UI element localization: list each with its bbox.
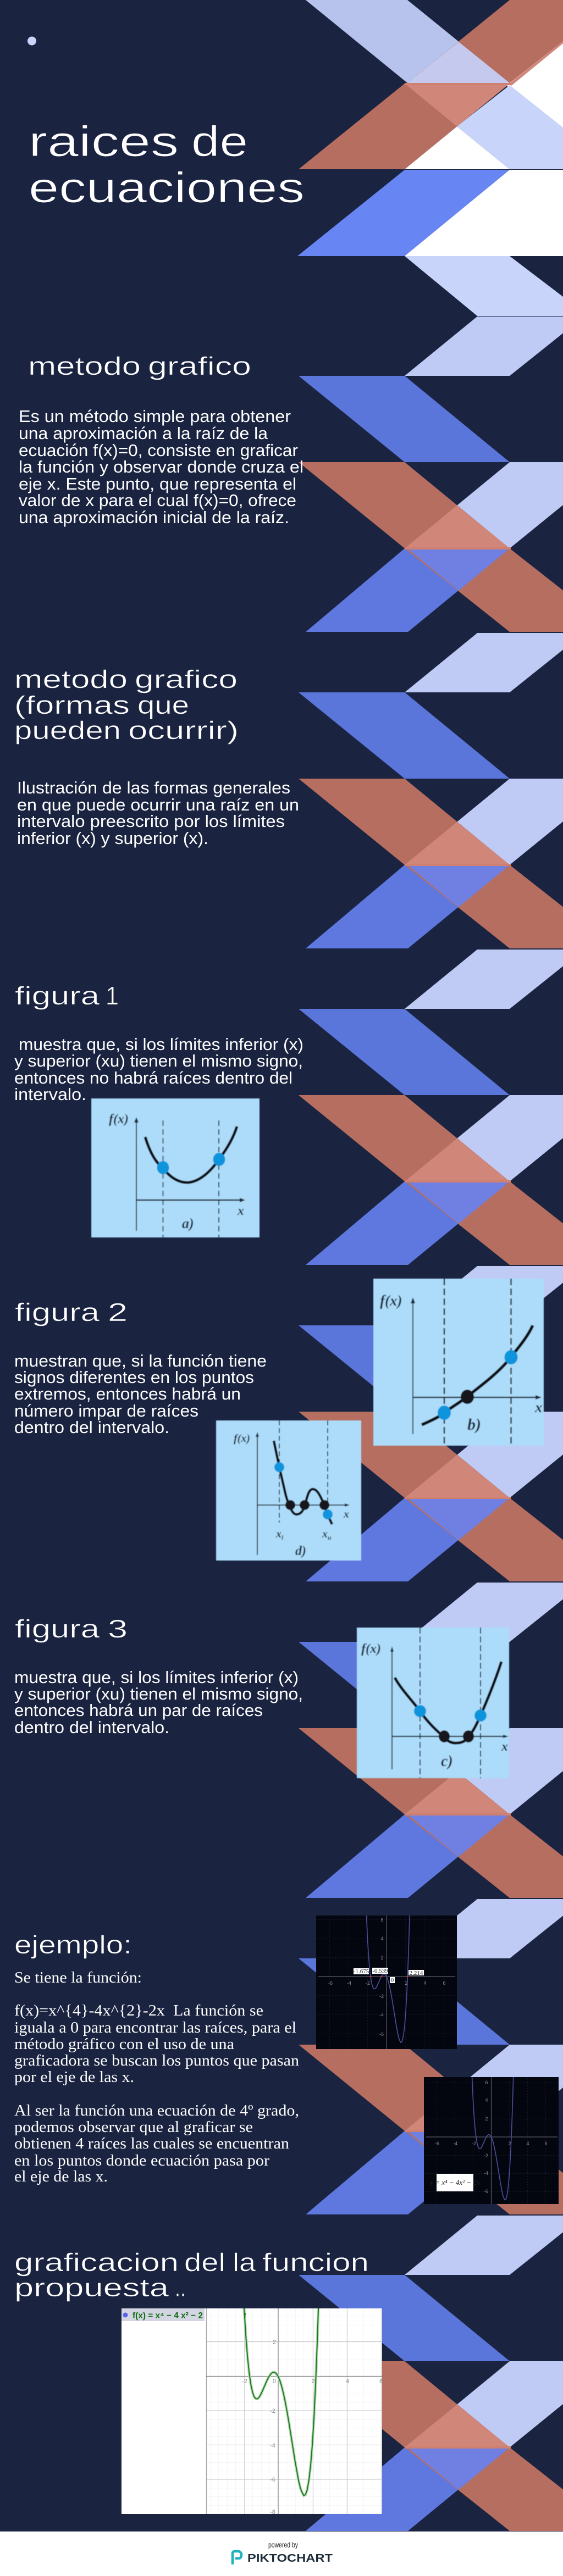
text block: metodo grafico description: ecuación f(x)=0, consiste en graficar xyxy=(19,441,298,460)
heading: graficacion de la funcion: propuesta xyxy=(14,2273,169,2302)
heading: graficacion de la funcion xyxy=(14,2248,369,2302)
text block: ejemplo xyxy=(14,1969,300,2185)
chart: figure b: f(x) xyxy=(380,1292,402,1309)
text block: ejemplo: Se tiene la función: xyxy=(14,1969,142,1986)
chart: dark graph with equation: 6 xyxy=(485,2080,488,2085)
chart: figure d: f(x) xyxy=(234,1433,250,1445)
chart: function graph white panel: -4 xyxy=(270,2442,275,2449)
text block: figura 2: dentro del intervalo. xyxy=(14,1418,169,1437)
chart: function graph white panel: 6 xyxy=(379,2378,383,2385)
heading: ejemplo: ejemplo: xyxy=(14,1930,132,1959)
text block: ejemplo: obtienen 4 raíces las cuales se encuentran xyxy=(14,2135,290,2152)
heading: metodo grafico: metodo xyxy=(28,352,141,380)
chart: dark graph with equation: y = x⁴ − 4x² − 2x xyxy=(429,2178,480,2186)
chart: figure c: c) xyxy=(441,1753,453,1770)
chart: figure b: b) xyxy=(467,1415,481,1434)
text block: metodo grafico description: valor de x para el cual f(x)=0, ofrece xyxy=(19,491,296,510)
text block: metodo grafico description: eje x. Este punto, que representa el xyxy=(19,474,296,493)
chart: dark graph with roots: 6 xyxy=(380,1917,384,1923)
chart: dark graph with equation: 2 xyxy=(485,2116,488,2122)
piktochart wordmark: PIKTOCHART xyxy=(247,2552,333,2564)
heading: metodo grafico formas: (formas xyxy=(14,691,130,719)
heading: figura 3: figura xyxy=(15,1614,100,1643)
chart: dark graph with equation: 4 xyxy=(526,2141,529,2146)
heading: metodo grafico formas: pueden xyxy=(14,716,121,745)
heading: metodo grafico xyxy=(28,352,251,380)
title: raices xyxy=(29,117,179,165)
chart: function graph white panel: 0 xyxy=(273,2378,276,2385)
text block: formas description: Ilustración de las formas generales xyxy=(17,778,290,797)
heading: figura 1 xyxy=(15,981,119,1010)
chart: dark graph with equation: -6 xyxy=(435,2141,439,2146)
chart: dark graph with roots: -2 xyxy=(366,1980,370,1986)
chart: function graph white panel: -6 xyxy=(270,2477,275,2483)
chart: dark graph with equation: -6 xyxy=(484,2189,488,2194)
text block: metodo grafico description: una aproximación inicial de la raíz. xyxy=(19,508,289,527)
text block: metodo grafico description: la función y observar donde cruza el xyxy=(19,457,303,476)
chart: dark graph with equation: 4 xyxy=(485,2097,488,2103)
heading: graficacion de la funcion: la xyxy=(233,2248,256,2277)
chart: dark graph with roots: -0.539 xyxy=(372,1968,388,1974)
chart: function graph white panel: f xyxy=(244,2312,246,2320)
chart: dark graph with roots: -2 xyxy=(379,1994,384,1999)
chart: figure d: u xyxy=(328,1534,332,1541)
text block: ejemplo: iguala a 0 para encontrar las raíces, para el xyxy=(14,2019,296,2036)
chart: function graph white panel: 2 xyxy=(273,2339,276,2346)
chart: function graph white panel: f(x) = x⁴ − 4 x² − 2 xyxy=(133,2311,203,2320)
chart: figure d: x xyxy=(343,1508,349,1520)
text block: figura 3 xyxy=(14,1668,303,1737)
text block: formas description: en que puede ocurrir una raíz en un xyxy=(17,795,299,814)
text block: ejemplo: en los puntos donde ecuación pasa por xyxy=(14,2152,269,2169)
heading: figura 2: figura xyxy=(15,1298,100,1326)
heading: graficacion de la funcion: funcion xyxy=(262,2248,369,2277)
chart: figure d: l xyxy=(282,1534,284,1541)
title: de xyxy=(191,117,248,165)
text block: figura 3: entonces habrá un par de raíces xyxy=(14,1701,263,1720)
heading: metodo grafico formas: que xyxy=(137,691,189,719)
heading: figura 3: 3 xyxy=(108,1614,128,1643)
chart: dark graph with roots: 0 xyxy=(391,1977,394,1984)
bullet dot xyxy=(27,36,36,45)
text block: formas description xyxy=(17,778,299,848)
text block: ejemplo: podemos observar que al graficar se xyxy=(14,2118,253,2136)
text block: figura 1: muestra que, si los límites inferior (x) xyxy=(19,1035,303,1054)
text block: figura 1: entonces no habrá raíces dentro del xyxy=(14,1068,292,1087)
text block: ejemplo: Al ser la función una ecuación de 4º grado, xyxy=(14,2102,299,2119)
title xyxy=(29,117,305,212)
chart: function graph white panel: -2 xyxy=(242,2378,247,2385)
text block: figura 1: y superior (xu) tienen el mismo signo, xyxy=(14,1051,303,1070)
heading: figura 2: 2 xyxy=(108,1298,128,1326)
text block: figura 3: muestra que, si los límites inferior (x) xyxy=(14,1668,299,1687)
heading: metodo grafico formas: grafico xyxy=(135,665,238,693)
chart: dark graph with roots: 6 xyxy=(443,1980,446,1986)
chart: figure c: x xyxy=(501,1740,508,1754)
text block: figura 3: y superior (xu) tienen el mismo signo, xyxy=(14,1684,303,1703)
footer xyxy=(0,2531,563,2576)
chart: dark graph with equation: -4 xyxy=(453,2141,457,2146)
chart: dark graph with roots: -4 xyxy=(379,2012,384,2018)
chart: dark graph with equation: -2 xyxy=(472,2141,476,2146)
icon: piktochart logo xyxy=(233,2551,241,2564)
chart: function graph white panel: -2 xyxy=(270,2408,275,2414)
heading: figura 1: 1 xyxy=(106,981,119,1010)
heading: metodo grafico formas xyxy=(14,665,239,745)
chart: figure d: d) xyxy=(295,1544,306,1558)
chart: dark graph with roots xyxy=(316,1916,457,2049)
heading: metodo grafico formas: metodo xyxy=(14,665,128,693)
text block: figura 2: número impar de raíces xyxy=(14,1401,198,1420)
chart: figure b: x xyxy=(534,1399,542,1415)
text block: figura 1: intervalo. xyxy=(14,1085,86,1104)
heading: graficacion de la funcion: del xyxy=(184,2248,225,2277)
chart: figure a: x xyxy=(237,1204,244,1218)
chart: function graph white panel: 4 xyxy=(346,2378,349,2385)
chart: dark graph with roots: 4 xyxy=(380,1936,384,1941)
chart: figure a xyxy=(91,1098,260,1237)
chart: figure d: x xyxy=(322,1528,328,1540)
chart: dark graph with equation: 2 xyxy=(508,2141,511,2146)
chart: function graph white panel: -8 xyxy=(270,2509,275,2516)
chart: figure d: x xyxy=(276,1528,282,1540)
heading: figura 2 xyxy=(15,1298,128,1326)
text block: formas description: intervalo preescrito por los límites xyxy=(17,812,285,831)
text block: ejemplo: por el eje de las x. xyxy=(14,2068,134,2086)
text block: formas description: inferior (x) y superior (x). xyxy=(17,829,208,848)
chart: dark graph with roots: -6 xyxy=(328,1980,333,1986)
chart: figure d xyxy=(216,1420,361,1561)
text block: metodo grafico description: una aproximación a la raíz de la xyxy=(19,424,268,443)
chart: dark graph with roots: 2 xyxy=(405,1980,408,1986)
chart: function graph white panel xyxy=(122,2308,383,2514)
chart: figure a: a) xyxy=(182,1215,194,1231)
text block: ejemplo: método gráfico con el uso de una xyxy=(14,2035,234,2053)
powered by label: powered by xyxy=(268,2540,298,2549)
chart: dark graph with roots: 2 xyxy=(380,1955,384,1961)
heading: graficacion de la funcion: graficacion xyxy=(14,2248,179,2277)
chart: function graph white panel: 2 xyxy=(311,2378,315,2385)
chart: dark graph with roots: -1.675 xyxy=(354,1968,369,1975)
chart: dark graph with roots: 4 xyxy=(423,1980,427,1986)
chart: dark graph with equation: -4 xyxy=(484,2170,488,2176)
text block: figura 2 xyxy=(14,1351,267,1437)
title: ecuaciones xyxy=(29,163,305,212)
chart: figure c xyxy=(357,1628,509,1778)
chart: dark graph with roots: -6 xyxy=(379,2031,384,2037)
decorative geometric shapes xyxy=(297,0,563,2531)
heading: metodo grafico: grafico xyxy=(148,352,251,380)
chart: dark graph with equation: 6 xyxy=(544,2141,548,2146)
heading: figura 1: figura xyxy=(15,981,100,1010)
text block: ejemplo: f(x)=x^{4}-4x^{2}-2x La función se xyxy=(14,2002,263,2019)
text block: figura 1 xyxy=(14,1035,303,1104)
chart: figure b xyxy=(373,1279,544,1446)
text block: ejemplo: graficadora se buscan los puntos que pasan xyxy=(14,2052,300,2069)
chart: figure c: f(x) xyxy=(361,1642,381,1656)
text block: figura 2: extremos, entonces habrá un xyxy=(14,1384,241,1403)
chart: dark graph with roots: -4 xyxy=(347,1980,351,1986)
chart: figure a: f(x) xyxy=(109,1112,129,1126)
text block: figura 2: signos diferentes en los puntos xyxy=(14,1368,254,1387)
text block: metodo grafico description: Es un método simple para obtener xyxy=(19,407,291,426)
heading: metodo grafico formas: ocurrir) xyxy=(128,716,239,745)
text block: metodo grafico description xyxy=(19,407,303,527)
text block: figura 2: muestran que, si la función tiene xyxy=(14,1351,267,1370)
heading: graficacion de la funcion: .. xyxy=(175,2273,186,2302)
text block: figura 3: dentro del intervalo. xyxy=(14,1718,169,1737)
heading: figura 3 xyxy=(15,1614,128,1643)
chart: dark graph with equation: -2 xyxy=(484,2153,488,2158)
chart: dark graph with equation xyxy=(424,2077,559,2204)
text block: ejemplo: el eje de las x. xyxy=(14,2168,108,2185)
chart: dark graph with roots: 2.214 xyxy=(410,1970,423,1977)
